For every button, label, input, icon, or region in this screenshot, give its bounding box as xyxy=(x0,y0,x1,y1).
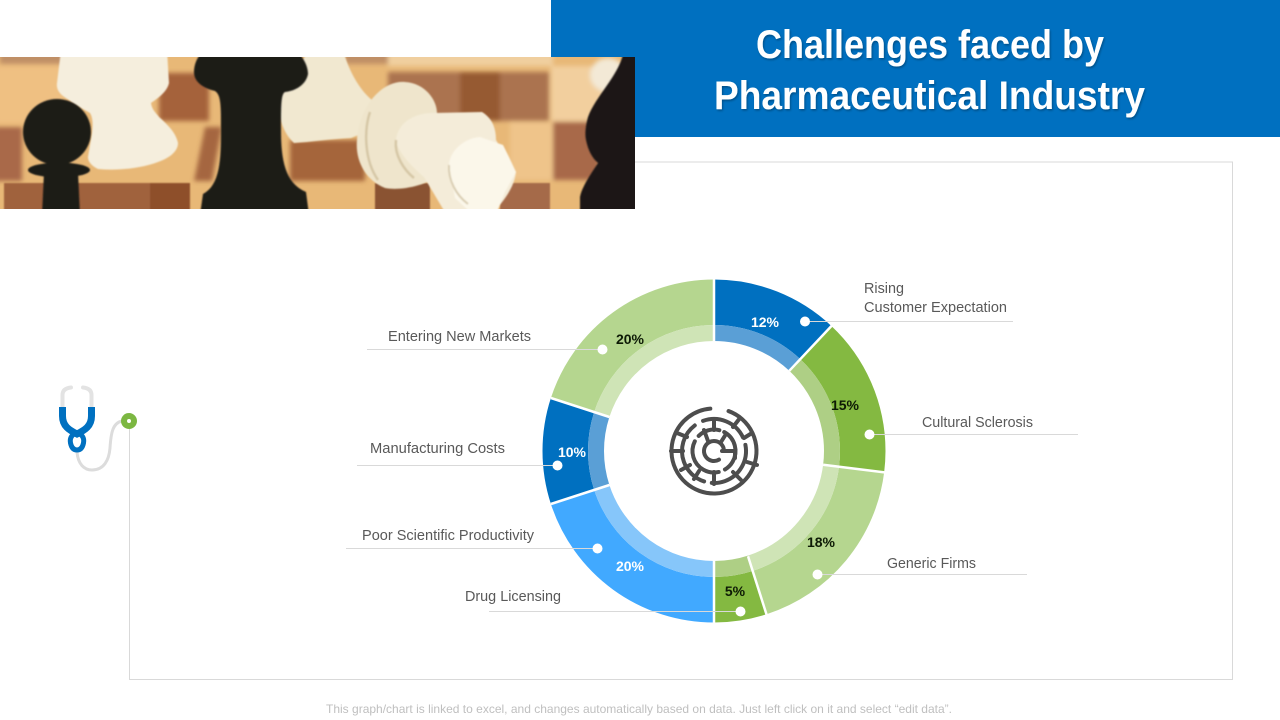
inner ring segments xyxy=(596,333,832,569)
label: Manufacturing Costs: Manufacturing Costs xyxy=(370,441,505,457)
title banner xyxy=(551,0,1280,137)
label: Poor Scientific Productivity xyxy=(346,528,602,554)
white bishop xyxy=(57,50,178,170)
title: Pharmaceutical Industry xyxy=(714,74,1146,118)
percentage labels: 20% xyxy=(616,331,645,347)
percentage labels: 12% xyxy=(751,314,780,330)
icon: maze xyxy=(660,397,768,505)
label: Poor Scientific Productivity: Poor Scientific Productivity xyxy=(362,528,535,544)
label: Entering New Markets xyxy=(367,329,608,354)
black pawn xyxy=(23,99,91,215)
photo: chess pieces on a board xyxy=(0,50,640,215)
percentage labels: 5% xyxy=(725,583,746,599)
label: Rising Customer Expectation: Customer Expectation xyxy=(864,300,1007,316)
content frame xyxy=(130,162,1232,680)
footnote: This graph/chart is linked to excel, and changes automatically based on data. Just left click on it and select “edit data”. xyxy=(326,702,952,716)
icon: green node xyxy=(121,413,137,429)
title xyxy=(714,23,1146,118)
segment separators xyxy=(551,278,886,624)
label: Manufacturing Costs xyxy=(357,441,562,470)
donut chart xyxy=(551,278,886,624)
label: Rising Customer Expectation: Rising xyxy=(864,281,904,297)
label: Rising Customer Expectation xyxy=(800,281,1013,326)
black knight right edge xyxy=(579,57,635,209)
icon: stethoscope xyxy=(62,388,122,470)
percentage labels: 20% xyxy=(616,558,645,574)
label: Generic Firms xyxy=(812,556,1027,580)
label: Generic Firms: Generic Firms xyxy=(887,556,976,572)
label: Entering New Markets: Entering New Markets xyxy=(388,329,531,345)
title: Challenges faced by xyxy=(756,23,1105,67)
outer ring segments xyxy=(565,302,863,600)
percentage labels xyxy=(558,314,860,599)
label: Cultural Sclerosis: Cultural Sclerosis xyxy=(922,415,1033,431)
percentage labels: 18% xyxy=(807,534,836,550)
white fallen king xyxy=(278,50,516,214)
percentage labels: 10% xyxy=(558,444,587,460)
label: Drug Licensing xyxy=(465,589,746,616)
label: Drug Licensing: Drug Licensing xyxy=(465,589,561,605)
label: Cultural Sclerosis xyxy=(864,415,1078,440)
black piece centre xyxy=(194,50,309,215)
percentage labels: 15% xyxy=(831,397,860,413)
